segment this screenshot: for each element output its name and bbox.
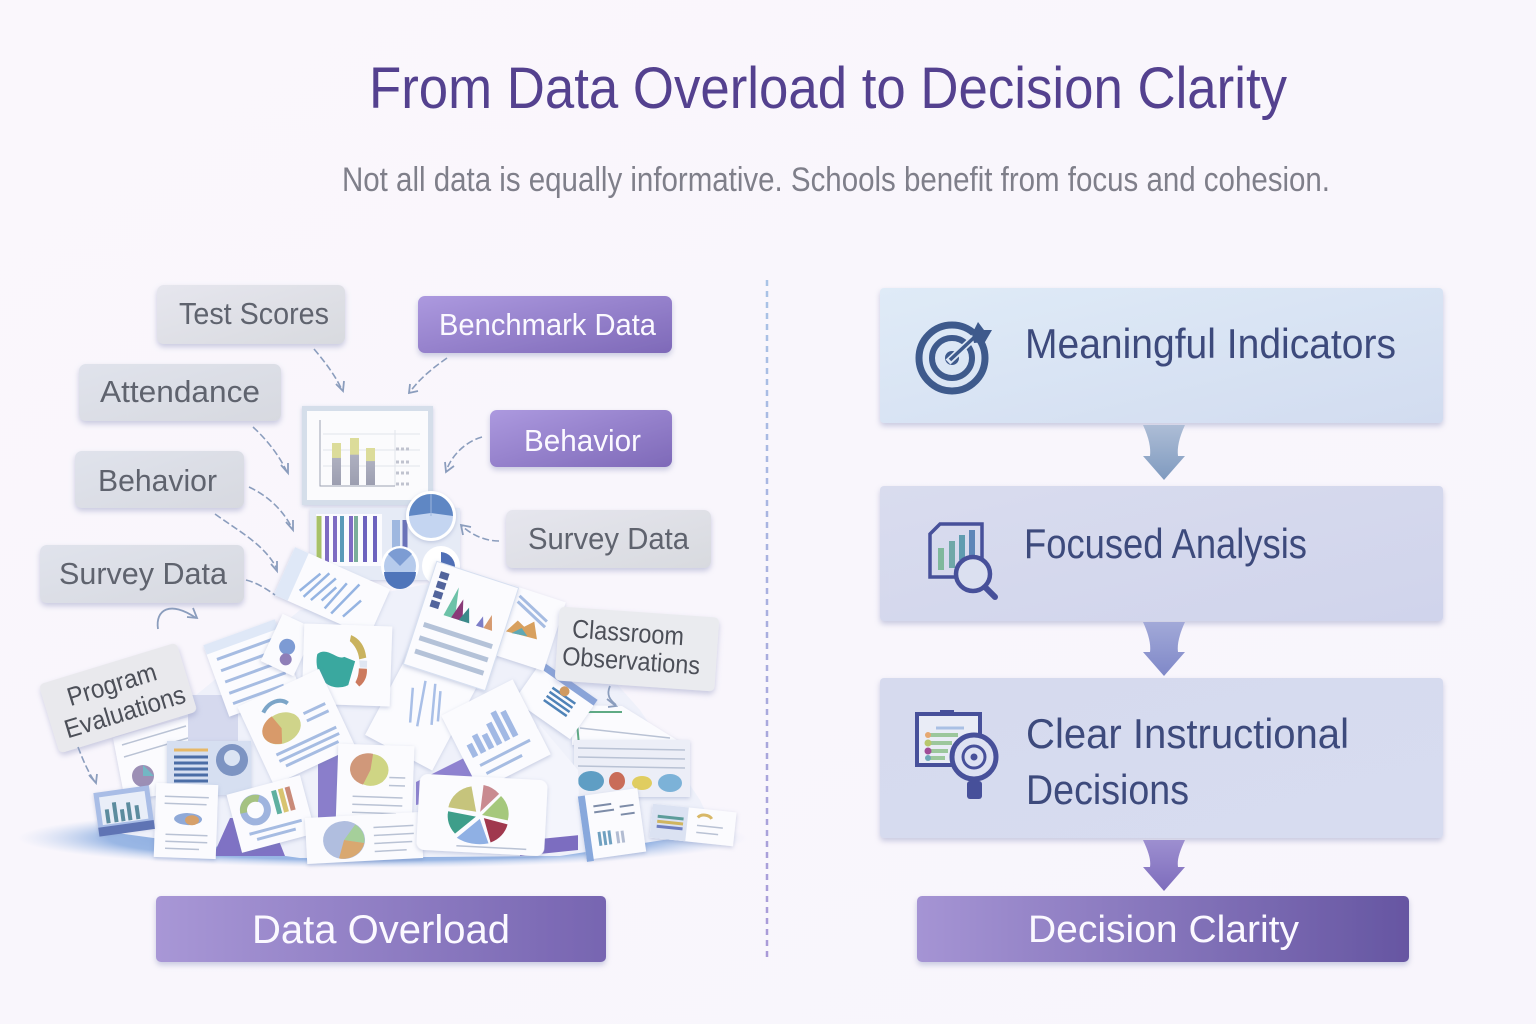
label: test scores: Test Scores xyxy=(179,296,329,331)
arrow: step two to three xyxy=(1143,622,1185,676)
chart monitor lower xyxy=(310,508,460,580)
label: attendance: Attendance xyxy=(100,374,260,409)
icon: clipboard with lens xyxy=(917,710,996,799)
subtitle: Not all data is equally informative. Schools benefit from focus and cohesion. xyxy=(342,161,1330,199)
large pie paper xyxy=(416,774,548,856)
right stacked report with blobs xyxy=(574,740,690,797)
label: behavior grey: Behavior xyxy=(98,463,217,498)
label: classroom observations xyxy=(555,607,719,691)
label: program evaluations: Program xyxy=(63,656,160,712)
scattered paper behind pie card xyxy=(261,614,315,676)
panel: meaningful indicators xyxy=(880,288,1443,423)
label: decision clarity xyxy=(917,896,1409,962)
blue bar chart paper xyxy=(441,679,551,791)
paper with blue diagonal bars xyxy=(274,547,390,637)
purple folder right upper xyxy=(416,755,490,805)
center paper with diagonal lines xyxy=(365,639,483,771)
bottom pie paper xyxy=(305,812,423,864)
right paper with color chart xyxy=(490,585,566,671)
text: clear instructional decisions: Decisions xyxy=(1026,766,1189,813)
label: survey data right: Survey Data xyxy=(528,521,690,556)
center pie document xyxy=(336,744,414,826)
text: focused analysis: Focused Analysis xyxy=(1024,520,1307,567)
icon: chart with magnifier xyxy=(930,524,995,597)
label: benchmark data xyxy=(418,296,672,353)
back left report xyxy=(113,716,198,800)
right side white sheet xyxy=(510,725,580,840)
label: survey data right xyxy=(506,510,711,568)
label: survey data left: Survey Data xyxy=(59,556,228,591)
arrows into the pile xyxy=(78,349,616,783)
chart monitor top xyxy=(302,406,433,505)
label: data overload xyxy=(156,896,606,962)
pie badge large xyxy=(406,491,456,541)
label: survey data left xyxy=(40,545,244,603)
label: program evaluations: Evaluations xyxy=(61,679,189,744)
label: program evaluations xyxy=(39,643,197,753)
back upper folder xyxy=(188,695,238,745)
panel: clear instructional decisions xyxy=(880,678,1443,838)
label: behavior grey xyxy=(75,451,244,508)
panel: focused analysis xyxy=(880,486,1443,621)
label: benchmark data: Benchmark Data xyxy=(439,307,657,342)
tall paper bottom left xyxy=(154,783,218,859)
back left dashboard card xyxy=(167,741,251,795)
text: meaningful indicators: Meaningful Indicators xyxy=(1025,320,1396,367)
pile body xyxy=(110,575,715,858)
label: data overload: Data Overload xyxy=(252,908,510,952)
icon: target with arrow xyxy=(919,322,992,391)
purple folder left lower xyxy=(213,818,285,856)
teal pie chart card xyxy=(302,623,392,707)
small stacked paper right xyxy=(649,804,737,846)
blue report booklet xyxy=(578,788,646,862)
label: attendance xyxy=(79,364,281,421)
arrow: step three to clarity xyxy=(1143,840,1185,891)
rear right report xyxy=(572,705,680,745)
label: behavior purple xyxy=(490,410,672,467)
small chart monitor xyxy=(93,785,155,837)
purple folder right lower xyxy=(520,726,578,856)
text: clear instructional decisions: Clear Instructional xyxy=(1026,710,1349,757)
panel: data overload pile xyxy=(17,406,747,868)
pie badge partial xyxy=(422,546,460,586)
paper with line rows left xyxy=(203,619,301,717)
label: behavior purple: Behavior xyxy=(524,423,641,458)
label: decision clarity: Decision Clarity xyxy=(1028,909,1299,951)
orange pie report xyxy=(237,669,355,785)
donut and bars paper xyxy=(227,775,315,853)
purple folder left upper xyxy=(318,750,342,818)
pie badge small xyxy=(381,546,419,589)
text: clear instructional decisions xyxy=(1026,710,1349,813)
center divider xyxy=(766,280,768,962)
arrow: step one to two xyxy=(1143,425,1185,480)
pile ground shadow xyxy=(17,808,747,868)
label: classroom observations: Observations xyxy=(561,641,701,680)
tilted chart report xyxy=(403,561,519,691)
small card right of pile xyxy=(514,661,598,739)
title: From Data Overload to Decision Clarity xyxy=(369,56,1287,121)
label: classroom observations: Classroom xyxy=(571,613,685,651)
label: test scores xyxy=(157,285,345,344)
